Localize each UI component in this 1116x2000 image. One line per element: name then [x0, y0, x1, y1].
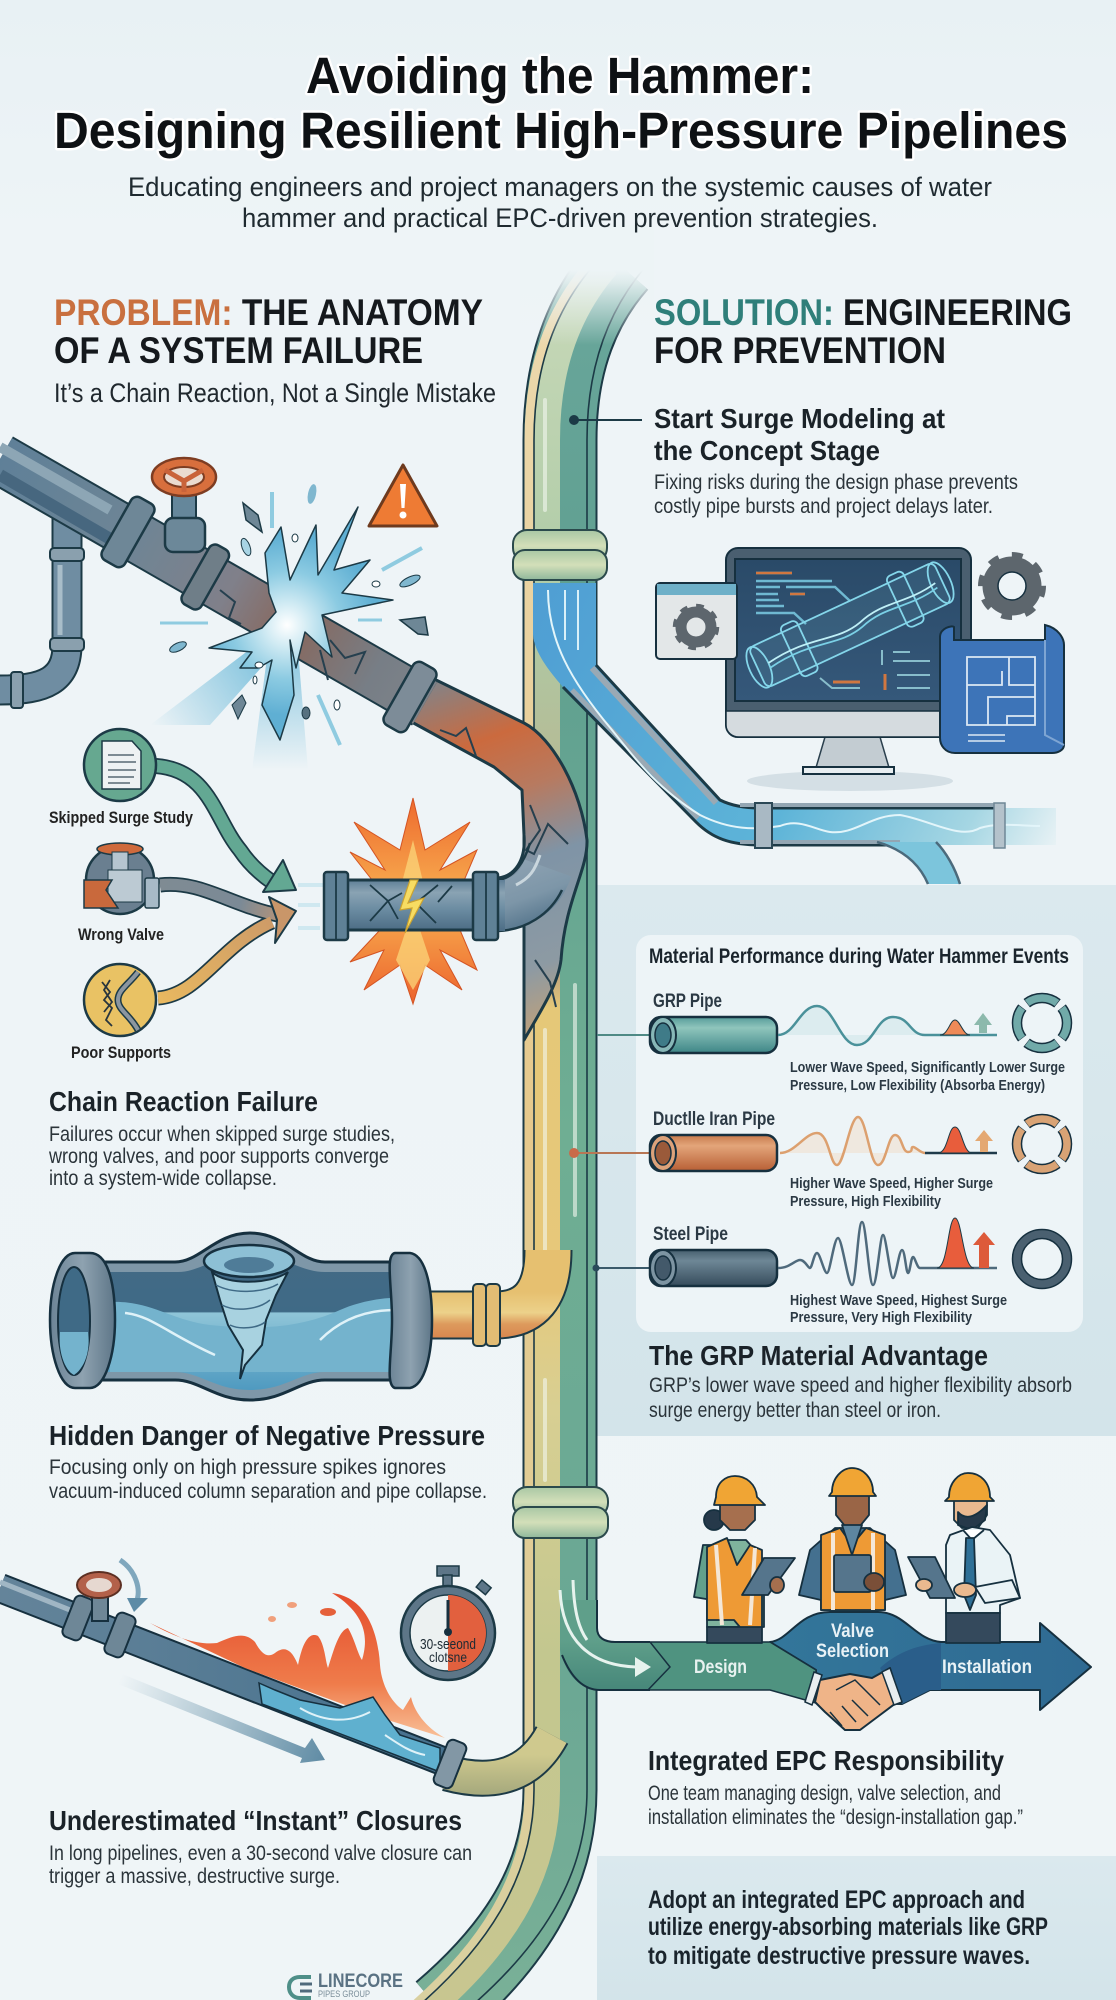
title: Avoiding the Hammer: — [306, 47, 814, 104]
flanges — [61, 1594, 95, 1642]
text block: negative pressure: Hidden Danger of Negative Pressure — [49, 1420, 485, 1451]
text block: chain reaction failure: wrong valves, and poor supports converge — [48, 1145, 389, 1168]
top pipe clamp — [513, 530, 607, 580]
cause label: wrong valve: Wrong Valve — [78, 925, 164, 944]
Ductile Iron row: Higher Wave Speed, Higher Surge — [790, 1175, 993, 1192]
icon: blueprint scroll — [940, 625, 1064, 753]
valve on burst pipe — [152, 458, 216, 552]
screen pipe wireframe — [738, 553, 962, 697]
text block: instant closures: Underestimated “Instant” Closures — [49, 1805, 462, 1836]
valve — [92, 1597, 108, 1621]
text block: GRP advantage: The GRP Material Advantage — [649, 1340, 988, 1371]
text block: chain reaction failure: into a system-wide collapse. — [49, 1167, 277, 1190]
text block: negative pressure — [49, 1420, 487, 1503]
text block: GRP advantage — [649, 1340, 1072, 1422]
heading: problem — [54, 292, 483, 371]
cause label: poor supports: Poor Supports — [71, 1043, 171, 1062]
text block: instant closures: In long pipelines, even a 30-second valve closure can — [49, 1842, 472, 1865]
arrow label: installation: Installation — [942, 1657, 1032, 1678]
text block: chain reaction failure: Chain Reaction Failure — [49, 1086, 318, 1117]
icon: warning triangle — [369, 465, 437, 526]
Steel row: Pressure, Very High Flexibility — [790, 1309, 973, 1326]
icon: handshake — [805, 1668, 902, 1730]
heading: solution: SOLUTION: ENGINEERING — [654, 292, 1072, 333]
Steel row — [592, 1218, 1067, 1326]
GRP row: GRP Pipe — [653, 991, 722, 1012]
GRP row: Pressure, Low Flexibility (Absorba Energy) — [790, 1077, 1045, 1094]
flanges — [99, 494, 157, 570]
elbow — [447, 1735, 552, 1778]
pipe elbow and process arrow — [560, 1580, 1091, 1710]
text block: chain reaction failure — [48, 1086, 395, 1190]
top fade of main pipe — [520, 225, 654, 345]
yellow branch pipe to tank — [430, 1250, 548, 1346]
flames — [150, 1593, 445, 1738]
GRP row: Lower Wave Speed, Significantly Lower Surge — [790, 1059, 1065, 1076]
heading: solution — [654, 292, 1072, 371]
team: woman engineer — [694, 1476, 795, 1643]
step: surge modeling: the Concept Stage — [654, 435, 880, 466]
cause icon: wrong valve — [84, 843, 159, 914]
icon: settings window — [656, 583, 737, 659]
Ductile Iron row: Pressure, High Flexibility — [790, 1193, 942, 1210]
water — [259, 1683, 440, 1772]
team: manager with tablet — [908, 1473, 1020, 1643]
text block: instant closures: trigger a massive, destructive surge. — [49, 1865, 340, 1888]
subtitle — [128, 172, 992, 233]
arrow label: valve: Valve — [831, 1621, 874, 1642]
cause label: skipped surge study: Skipped Surge Study — [49, 808, 193, 827]
tank with vortex — [50, 1233, 432, 1400]
arrow label: design: Design — [694, 1657, 747, 1678]
cracked horizontal pipe — [324, 843, 562, 940]
icon: gear — [982, 556, 1042, 616]
logo — [289, 1971, 403, 1999]
left drop pipe — [0, 515, 84, 708]
burst water splash — [150, 483, 428, 770]
text block: integrated EPC: Integrated EPC Responsibility — [648, 1745, 1004, 1776]
step: surge modeling: Start Surge Modeling at — [654, 403, 945, 434]
bursting diagonal pipe — [0, 447, 587, 1040]
text block: integrated EPC: One team managing design, valve selection, and — [648, 1782, 1001, 1805]
monitor illustration — [726, 548, 971, 791]
lower clamp — [513, 1487, 608, 1538]
cause icon: poor supports — [84, 964, 156, 1036]
subtitle: Educating engineers and project managers on the systemic causes of water — [128, 172, 992, 202]
cause icon: document — [84, 729, 156, 801]
flow arrow — [118, 1674, 325, 1763]
bent rusted elbow — [408, 678, 587, 1040]
Ductile Iron row — [569, 1109, 1077, 1210]
orange blast behind horizontal pipe — [350, 798, 477, 1004]
material performance card — [569, 935, 1083, 1332]
subtitle: hammer and practical EPC-driven prevention strategies. — [242, 203, 878, 233]
step: surge modeling — [654, 403, 1018, 518]
blast core — [396, 840, 430, 990]
vortex — [204, 1245, 294, 1277]
text block: instant closures — [49, 1805, 472, 1888]
central main pipeline — [409, 265, 647, 2000]
text block: negative pressure: Focusing only on high pressure spikes ignores — [49, 1456, 446, 1479]
icon: stopwatch: 30-seeond — [420, 1636, 476, 1653]
left flange — [50, 1253, 115, 1388]
text block: negative pressure: vacuum-induced column separation and pipe collapse. — [49, 1480, 487, 1503]
text block: integrated EPC: installation eliminates the “design-installation gap.” — [648, 1806, 1023, 1829]
icon: stopwatch — [401, 1566, 495, 1680]
callout dot: surge modeling — [569, 415, 642, 425]
heading: solution: FOR PREVENTION — [654, 330, 946, 371]
cause arrows converging — [156, 766, 323, 998]
heading: problem: PROBLEM: THE ANATOMY — [54, 292, 483, 333]
blue water branch pipe — [533, 583, 1056, 884]
panel: GRP material advantage band — [597, 885, 1116, 1436]
logo: PIPES GROUP — [318, 1989, 370, 1999]
GRP row — [597, 988, 1077, 1094]
Steel row: Steel Pipe — [653, 1224, 728, 1245]
Ductile Iron row: Ductlle Iran Pipe — [653, 1109, 775, 1130]
takeaway text — [648, 1886, 1048, 1970]
takeaway text: to mitigate destructive pressure waves. — [648, 1942, 1030, 1970]
icon: stopwatch: clotsne — [429, 1649, 467, 1665]
title — [54, 47, 1068, 159]
text block: GRP advantage: surge energy better than steel or iron. — [649, 1399, 941, 1422]
screen code lines — [756, 573, 850, 624]
title: Designing Resilient High-Pressure Pipelines — [54, 102, 1068, 159]
team: male engineer — [799, 1468, 906, 1610]
heading: problem: OF A SYSTEM FAILURE — [54, 330, 423, 371]
step: surge modeling: costly pipe bursts and project delays later. — [654, 495, 993, 518]
arrow label: selection: Selection — [816, 1641, 889, 1662]
takeaway text: Adopt an integrated EPC approach and — [648, 1886, 1025, 1914]
step: surge modeling: Fixing risks during the design phase prevents — [654, 471, 1018, 494]
Steel row: Highest Wave Speed, Highest Surge — [790, 1292, 1007, 1309]
closing valve pipe with surge — [0, 1560, 552, 1790]
text block: chain reaction failure: Failures occur when skipped surge studies, — [49, 1123, 395, 1146]
right flange — [390, 1253, 432, 1388]
logo: LINECORE — [318, 1971, 403, 1992]
rotation arrow — [120, 1560, 138, 1605]
subheading: chain reaction: It’s a Chain Reaction, Not a Single Mistake — [54, 378, 496, 408]
panel: takeaway band — [597, 1856, 1116, 2000]
text block: integrated EPC — [648, 1745, 1023, 1829]
